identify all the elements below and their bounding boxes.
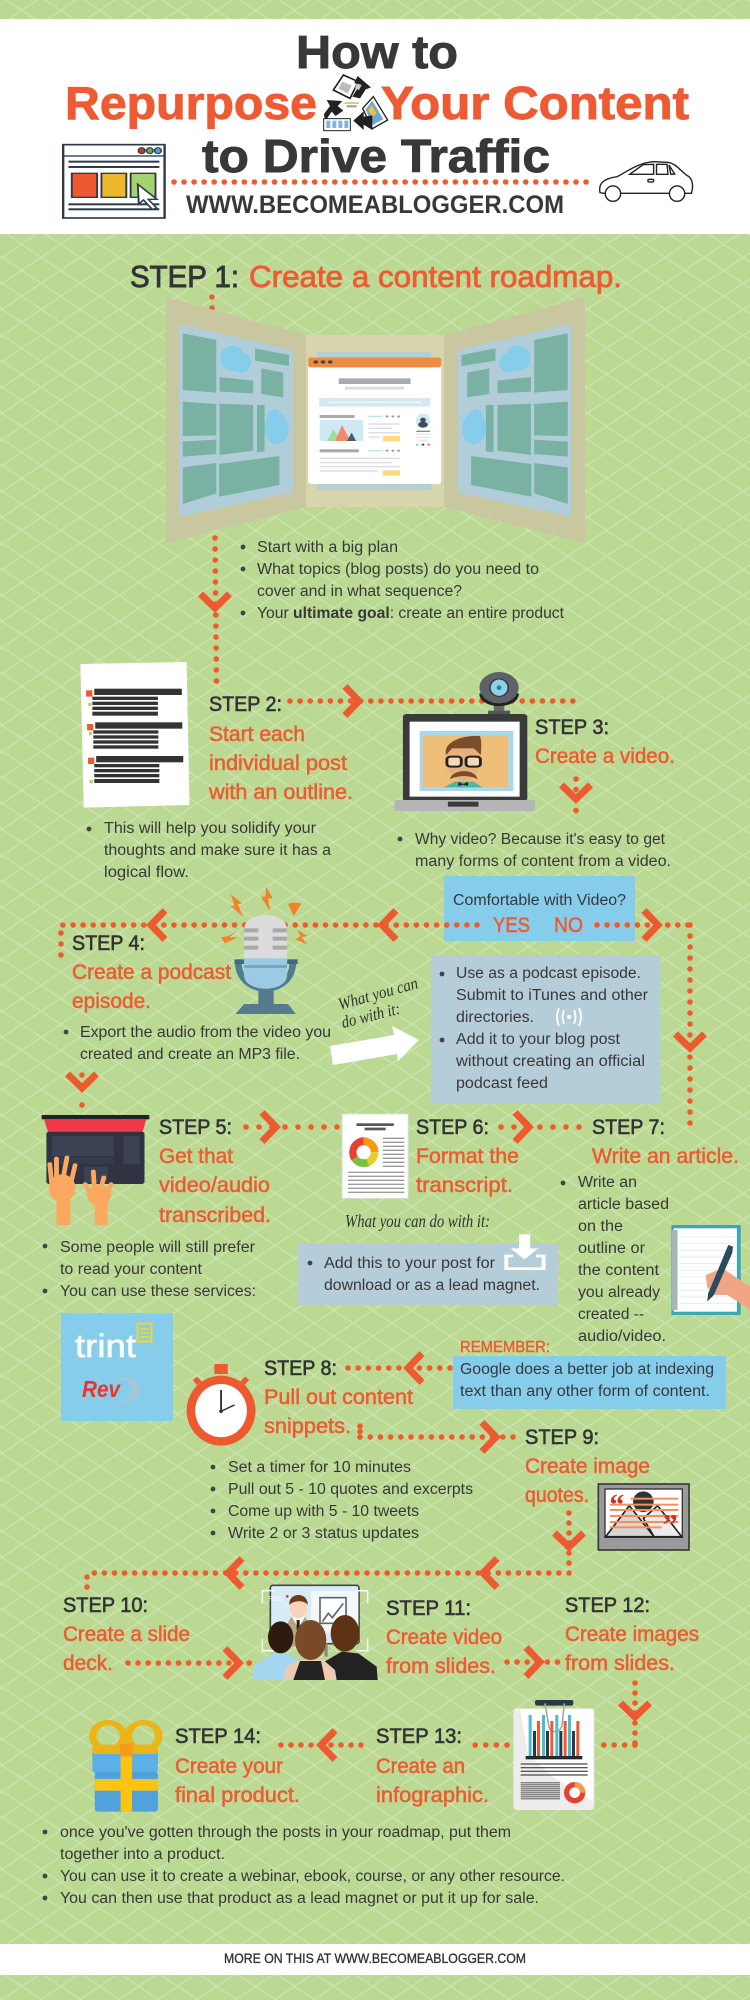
step 4 heading bbox=[72, 932, 231, 1013]
icon: report document with donut chart bbox=[342, 1114, 408, 1198]
step 6 heading bbox=[416, 1116, 519, 1197]
header band bbox=[0, 19, 750, 234]
step 1 heading: Create a content roadmap. bbox=[249, 259, 622, 294]
final bullets: once you've gotten through the posts in your roadmap, put them bbox=[60, 1824, 511, 1841]
panel: podcast uses: Use as a podcast episode. bbox=[456, 965, 641, 982]
step 5 heading: video/audio bbox=[159, 1174, 270, 1197]
title dotted line bbox=[174, 179, 588, 185]
step 1 bullets: Your ultimate goal: create an entire product bbox=[257, 605, 565, 622]
step 10 heading: STEP 10: bbox=[63, 1594, 148, 1617]
final bullets bbox=[43, 1824, 565, 1907]
step 5 heading: STEP 5: bbox=[159, 1116, 232, 1139]
step 5 bullets: Some people will still prefer bbox=[60, 1239, 255, 1256]
arrow: step 12 to step 13 bbox=[603, 1683, 650, 1745]
step 9 heading: Create image bbox=[525, 1455, 650, 1478]
step 11 heading: Create video bbox=[386, 1626, 502, 1649]
icon: framed image quote bbox=[598, 1484, 689, 1550]
icon: browser window bbox=[63, 145, 165, 218]
step 9 heading bbox=[525, 1426, 650, 1507]
website url: WWW.BECOMEABLOGGER.COM bbox=[186, 191, 564, 219]
handwritten note: what you can do with it: do with it: bbox=[339, 999, 402, 1032]
step 7 bullet: created -- bbox=[578, 1306, 644, 1323]
callout: remember: Google does a better job at indexing bbox=[460, 1361, 714, 1378]
arrow: step 11 to step 12 bbox=[507, 1648, 560, 1676]
step 9 heading: quotes. bbox=[525, 1484, 589, 1507]
step 6 heading: Format the bbox=[416, 1145, 519, 1168]
step 13 heading: infographic. bbox=[376, 1784, 489, 1807]
step 1 bullets: cover and in what sequence? bbox=[257, 583, 462, 600]
step 6 heading: STEP 6: bbox=[416, 1116, 489, 1139]
step 12 heading: from slides. bbox=[565, 1652, 675, 1675]
step 11 heading: STEP 11: bbox=[386, 1597, 471, 1620]
arrow: step 4 to step 5 bbox=[68, 1074, 96, 1106]
step 8 heading bbox=[264, 1357, 413, 1438]
arrow: step 6 to step 7 bbox=[501, 1112, 581, 1142]
step 1 bullets bbox=[241, 539, 565, 622]
final bullets: You can then use that product as a lead magnet or put it up for sale. bbox=[60, 1890, 539, 1907]
step 12 heading: STEP 12: bbox=[565, 1594, 650, 1617]
step 7 heading: STEP 7: bbox=[592, 1116, 665, 1139]
step 13 heading bbox=[376, 1725, 489, 1807]
callout: remember: text than any other form of content. bbox=[460, 1383, 710, 1400]
step 2 bullet: This will help you solidify your bbox=[104, 820, 316, 837]
icon: microphone with sparks bbox=[221, 887, 307, 1014]
title: Repurpose bbox=[65, 77, 317, 129]
browser page on board bbox=[308, 352, 441, 490]
icon: laptop with typing hands bbox=[42, 1115, 149, 1225]
arrow: yes path to step 4 bbox=[61, 910, 477, 956]
arrow: step 1 to step 2 bbox=[200, 538, 230, 684]
step 2 heading: with an outline. bbox=[208, 781, 353, 804]
icon: outline document bbox=[80, 662, 189, 808]
arrow: step 9 to step 10 bbox=[87, 1513, 584, 1588]
illustration: presenter and audience bbox=[252, 1585, 378, 1680]
handwritten note: what you can do with it bbox=[336, 973, 420, 1032]
step 1 heading: STEP 1: bbox=[130, 259, 239, 294]
step 7 heading: Write an article. bbox=[592, 1145, 739, 1168]
icon: webcam and laptop with video bbox=[394, 672, 535, 811]
panel: trint and rev services bbox=[61, 1313, 173, 1421]
step 8 bullets: Set a timer for 10 minutes bbox=[228, 1459, 411, 1476]
step 9 heading: STEP 9: bbox=[525, 1426, 599, 1449]
panel: trint and rev services: Rev bbox=[82, 1376, 121, 1402]
step 7 bullet: the content bbox=[578, 1262, 660, 1279]
arrow: step 2 to step 3 bbox=[290, 686, 574, 716]
step 3 bullet: many forms of content from a video. bbox=[415, 853, 671, 870]
handwritten note: what you can do with it: What you can bbox=[336, 973, 420, 1014]
step 4 bullet bbox=[64, 1024, 331, 1063]
step 5 bullets bbox=[43, 1239, 256, 1300]
panel: transcript uses: download or as a lead magnet. bbox=[324, 1277, 540, 1294]
step 14 heading: STEP 14: bbox=[175, 1725, 261, 1748]
step 10 heading bbox=[63, 1594, 190, 1675]
step 1 bullets: Start with a big plan bbox=[257, 539, 398, 556]
step 14 heading: Create your bbox=[175, 1755, 283, 1778]
step 7 bullet: article based bbox=[578, 1196, 669, 1213]
step 13 heading: Create an bbox=[376, 1755, 465, 1778]
step 7 heading bbox=[592, 1116, 739, 1168]
step 8 heading: snippets. bbox=[264, 1415, 351, 1438]
icon: notebook and pen bbox=[671, 1225, 750, 1315]
title: How to bbox=[296, 26, 458, 78]
footer band: MORE ON THIS AT WWW.BECOMEABLOGGER.COM bbox=[224, 1950, 526, 1966]
step 11 heading bbox=[386, 1597, 502, 1678]
panel: podcast uses: podcast feed bbox=[456, 1075, 548, 1092]
step 6 heading: transcript. bbox=[416, 1174, 513, 1197]
arrow: white arrow to uses box bbox=[330, 1026, 419, 1065]
arrow: step 3 down bbox=[562, 779, 590, 820]
panel: podcast uses: Add it to your blog post bbox=[456, 1031, 621, 1048]
step 4 heading: STEP 4: bbox=[72, 932, 145, 955]
arrow: remember to step 8 bbox=[347, 1354, 450, 1382]
step 8 bullets bbox=[211, 1459, 473, 1542]
panel: podcast uses: without creating an official bbox=[455, 1053, 645, 1070]
step 12 heading bbox=[565, 1594, 699, 1675]
step 12 heading: Create images bbox=[565, 1623, 699, 1646]
icon: stopwatch bbox=[187, 1364, 256, 1446]
step 8 heading: STEP 8: bbox=[264, 1357, 337, 1380]
panel: trint and rev services: trint bbox=[75, 1328, 136, 1364]
step 4 heading: episode. bbox=[72, 990, 151, 1013]
arrow: step 8 to step 9 bbox=[360, 1422, 517, 1452]
step 5 bullets: to read your content bbox=[60, 1261, 203, 1278]
step 7 bullet bbox=[561, 1174, 669, 1345]
step 3 heading: Create a video. bbox=[535, 745, 675, 768]
icon: framed image quote: “ bbox=[609, 1488, 624, 1521]
panel: podcast uses: Submit to iTunes and other bbox=[456, 987, 648, 1004]
step 7 bullet: Write an bbox=[578, 1174, 637, 1191]
title bbox=[65, 26, 689, 182]
panel: podcast uses bbox=[431, 955, 660, 1104]
step 8 bullets: Write 2 or 3 status updates bbox=[228, 1525, 419, 1542]
callout: remember: REMEMBER: bbox=[460, 1339, 550, 1356]
callout: comfortable with video: YES bbox=[493, 914, 530, 937]
step 5 heading bbox=[159, 1116, 271, 1227]
step 5 heading: Get that bbox=[159, 1145, 233, 1168]
step 10 heading: deck. bbox=[63, 1652, 113, 1675]
step 5 heading: transcribed. bbox=[159, 1204, 271, 1227]
step 3 heading bbox=[535, 716, 675, 768]
icon: recycling content arrows bbox=[324, 75, 388, 131]
step 10 heading: Create a slide bbox=[63, 1623, 190, 1646]
arrow: step 13 to step 14 bbox=[271, 1730, 507, 1760]
panel: transcript uses: Add this to your post for bbox=[324, 1255, 495, 1272]
step 8 bullets: Pull out 5 - 10 quotes and excerpts bbox=[228, 1481, 473, 1498]
step 4 bullet: created and create an MP3 file. bbox=[80, 1046, 300, 1063]
step 14 heading: final product. bbox=[175, 1784, 300, 1807]
step 2 heading: STEP 2: bbox=[209, 693, 282, 716]
icon: infographic document on clip bbox=[513, 1700, 594, 1810]
icon: download bbox=[506, 1234, 544, 1269]
arrow: step 10 to step 11 bbox=[128, 1648, 254, 1678]
step 8 heading: Pull out content bbox=[264, 1386, 413, 1409]
callout: comfortable with video: Comfortable with Video? bbox=[453, 892, 626, 909]
callout: remember bbox=[453, 1339, 726, 1409]
step 7 bullet: you already bbox=[578, 1284, 660, 1301]
step 2 bullet: logical flow. bbox=[104, 864, 189, 881]
illustration: content roadmap tri-fold board bbox=[166, 297, 585, 543]
icon: car bbox=[600, 162, 693, 201]
step 2 bullet: thoughts and make sure it has a bbox=[104, 842, 331, 859]
icon: broadcast waves bbox=[557, 1008, 581, 1026]
step 8 bullets: Come up with 5 - 10 tweets bbox=[228, 1503, 419, 1520]
step 2 heading bbox=[208, 693, 353, 804]
illustration: presenter and audience: REC bbox=[268, 1596, 283, 1603]
panel: podcast uses: directories. bbox=[456, 1009, 534, 1026]
handwritten note: what you can do with it: What you can do with it: bbox=[345, 1211, 490, 1231]
icon: framed image quote: ” bbox=[663, 1508, 678, 1541]
icon: gift box bbox=[92, 1723, 159, 1812]
step 14 heading bbox=[175, 1725, 300, 1807]
panel: transcript uses bbox=[298, 1234, 558, 1305]
final bullets: You can use it to create a webinar, ebook, course, or any other resource. bbox=[60, 1868, 565, 1885]
step 2 bullet bbox=[87, 820, 331, 881]
title: to Drive Traffic bbox=[202, 130, 550, 182]
step 1 bullets: What topics (blog posts) do you need to bbox=[257, 561, 539, 578]
step 2 heading: Start each bbox=[209, 723, 305, 746]
step 7 bullet: on the bbox=[578, 1218, 623, 1235]
arrow: step 5 to step 6 bbox=[246, 1112, 342, 1142]
callout: comfortable with video bbox=[444, 876, 635, 941]
step 13 heading: STEP 13: bbox=[376, 1725, 462, 1748]
step 3 bullet bbox=[398, 831, 671, 870]
step 5 bullets: You can use these services: bbox=[60, 1283, 256, 1300]
step 1 connector top bbox=[209, 297, 215, 320]
step 4 bullet: Export the audio from the video you bbox=[80, 1024, 331, 1041]
step 3 heading: STEP 3: bbox=[535, 716, 609, 739]
final bullets: together into a product. bbox=[60, 1846, 225, 1863]
step 7 bullet: audio/video. bbox=[578, 1328, 666, 1345]
step 3 bullet: Why video? Because it's easy to get bbox=[415, 831, 666, 848]
step 7 bullet: outline or bbox=[578, 1240, 645, 1257]
callout: comfortable with video: NO bbox=[554, 914, 583, 937]
title: Your Content bbox=[381, 77, 689, 129]
arrow: no path to step 7 bbox=[597, 910, 704, 1128]
footer band bbox=[0, 1944, 750, 1975]
step 11 heading: from slides. bbox=[386, 1655, 496, 1678]
step 2 heading: individual post bbox=[209, 752, 347, 775]
step 4 heading: Create a podcast bbox=[72, 961, 231, 984]
